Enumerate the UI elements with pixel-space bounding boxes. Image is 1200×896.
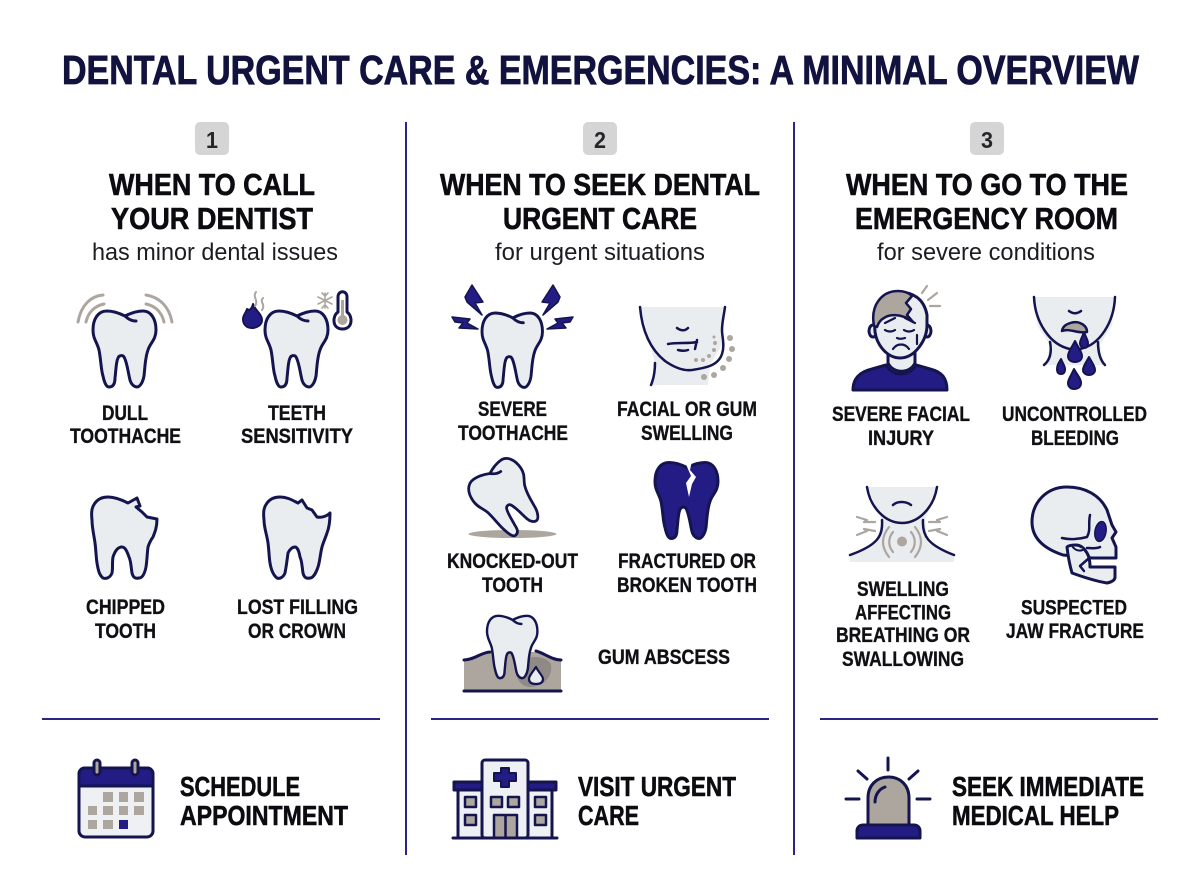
label: SENSITIVITY	[241, 425, 353, 448]
icon: injured person	[853, 286, 947, 390]
action: visit urgent care	[453, 760, 736, 838]
panel: when to seek dental urgent care	[440, 122, 760, 838]
call to action text: MEDICAL HELP	[952, 800, 1119, 831]
icon: swollen jaw	[640, 307, 735, 385]
label: LOST FILLING	[237, 596, 358, 619]
call to action text: VISIT URGENT	[578, 771, 736, 802]
icon: chipped tooth	[92, 497, 157, 578]
call to action text: SEEK IMMEDIATE	[952, 771, 1144, 802]
icon: skull	[1032, 487, 1116, 583]
subheading: for severe conditions	[877, 239, 1095, 266]
call to action text: APPOINTMENT	[180, 800, 348, 831]
label: SWELLING	[857, 578, 949, 601]
subheading: for urgent situations	[495, 239, 705, 266]
label: JAW FRACTURE	[1006, 620, 1144, 643]
label: BLEEDING	[1031, 427, 1119, 450]
label: FRACTURED OR	[618, 550, 756, 573]
icon: bleeding mouth	[1034, 297, 1115, 389]
icon: tooth with lost filling	[264, 497, 330, 578]
item: gum abscess	[464, 616, 730, 691]
item: teeth sensitivity	[241, 292, 353, 448]
panel: when to go to the emergency room	[832, 122, 1147, 838]
icon: tooth in gum with abscess	[464, 616, 561, 691]
step badge 1	[195, 122, 229, 155]
call to action text	[180, 771, 348, 831]
label: FACIAL OR GUM	[617, 398, 757, 421]
call to action text	[952, 771, 1144, 831]
label: CHIPPED	[86, 596, 165, 619]
label: BROKEN TOOTH	[617, 574, 757, 597]
icon: tooth with heat and cold	[243, 292, 351, 387]
item: severe facial injury	[832, 286, 970, 450]
item: severe toothache	[452, 285, 573, 445]
call to action text: CARE	[578, 800, 639, 831]
label: TOOTHACHE	[70, 425, 181, 448]
icon: knocked-out tooth with shadow	[463, 453, 556, 544]
item: uncontrolled bleeding	[1002, 297, 1147, 450]
label: TOOTHACHE	[458, 422, 568, 445]
label: BREATHING OR	[836, 624, 970, 647]
label	[836, 578, 970, 671]
label: DULL	[102, 402, 148, 425]
call to action text	[578, 771, 736, 831]
step badge 2	[583, 122, 617, 155]
label	[1002, 403, 1147, 450]
label: SWALLOWING	[842, 648, 964, 671]
heading: when to seek dental urgent care: URGENT CARE	[503, 201, 697, 236]
label: INJURY	[868, 427, 934, 450]
step badge 3: 3	[981, 127, 993, 153]
label	[1006, 596, 1144, 643]
panel: when to call your dentist	[70, 122, 358, 837]
step badge 3	[970, 122, 1004, 155]
item: facial or gum swelling	[617, 307, 757, 445]
label	[832, 403, 970, 450]
label	[458, 398, 568, 445]
item: suspected jaw fracture	[1006, 487, 1144, 643]
call to action text: SCHEDULE	[180, 771, 300, 802]
label: SWELLING	[641, 422, 733, 445]
label: GUM ABSCESS	[598, 646, 730, 669]
label: OR CROWN	[248, 620, 346, 643]
icon: fractured tooth	[655, 461, 718, 538]
icon: calendar	[79, 760, 153, 837]
heading: when to go to the emergency room: WHEN TO GO TO THE	[846, 167, 1128, 202]
subheading: has minor dental issues	[92, 239, 338, 266]
label: TOOTH	[482, 574, 543, 597]
label: TEETH	[268, 402, 326, 425]
label: UNCONTROLLED	[1002, 403, 1147, 426]
label: AFFECTING	[855, 602, 951, 624]
step badge 1: 1	[206, 127, 218, 153]
label: SEVERE	[478, 398, 547, 421]
heading: when to go to the emergency room: EMERGENCY ROOM	[855, 201, 1118, 236]
heading: when to seek dental urgent care	[440, 167, 760, 236]
label: SEVERE FACIAL	[832, 403, 970, 426]
heading: when to seek dental urgent care: WHEN TO SEEK DENTAL	[440, 167, 760, 202]
item: dull toothache	[70, 295, 181, 448]
heading: when to call your dentist: WHEN TO CALL	[109, 167, 315, 202]
icon: tooth with lightning bolts	[452, 285, 573, 387]
label	[237, 596, 358, 643]
label: TOOTH	[95, 620, 156, 643]
label: KNOCKED-OUT	[447, 550, 578, 573]
label: SUSPECTED	[1021, 596, 1127, 620]
label	[617, 550, 757, 597]
step badge 2: 2	[594, 127, 606, 153]
icon: tooth with vibration arcs	[78, 295, 172, 387]
item: knocked-out tooth	[447, 453, 578, 597]
icon: hospital	[453, 760, 557, 838]
item: chipped tooth	[86, 497, 165, 643]
label	[86, 596, 165, 643]
action: schedule appointment	[79, 760, 348, 837]
item: swelling affecting breathing or swallowing	[836, 487, 970, 671]
heading: when to call your dentist	[109, 167, 315, 236]
label	[447, 550, 578, 597]
icon: emergency siren	[846, 758, 930, 838]
item: lost filling or crown	[237, 497, 358, 643]
heading: when to call your dentist: YOUR DENTIST	[111, 201, 313, 236]
label	[70, 402, 181, 448]
icon: swollen throat	[850, 487, 954, 562]
heading: when to go to the emergency room	[846, 167, 1128, 236]
label	[241, 402, 353, 448]
action: seek immediate medical help	[846, 758, 1144, 838]
label	[617, 398, 757, 445]
item: fractured or broken tooth	[617, 461, 757, 597]
